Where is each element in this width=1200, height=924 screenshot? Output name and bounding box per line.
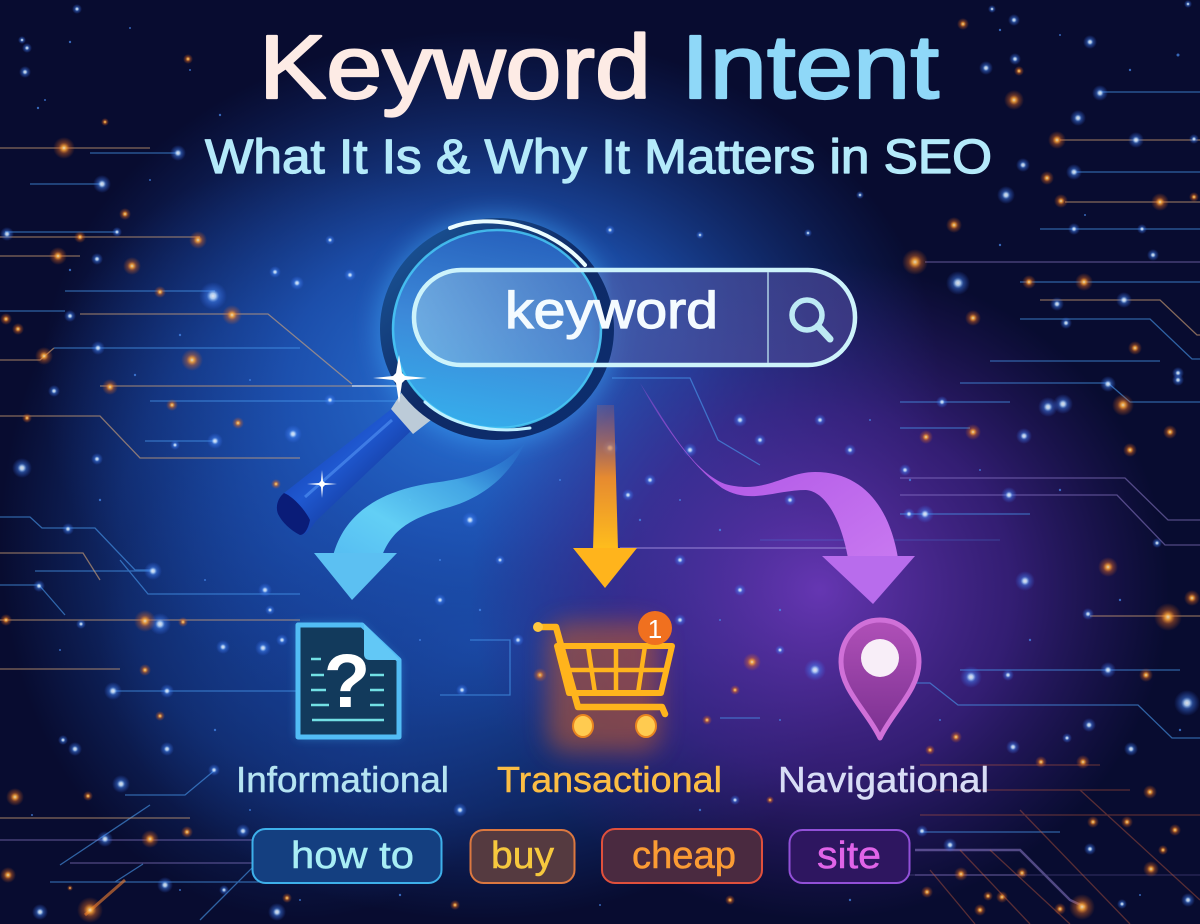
title: Keyword: [259, 18, 651, 118]
search field: [414, 270, 855, 365]
subtitle: What It Is & Why It Matters in SEO: [205, 131, 992, 184]
icon: lens: [391, 228, 603, 430]
tag: site: site: [817, 835, 881, 877]
tag: buy: buy: [491, 835, 554, 877]
cart badge: [638, 611, 672, 645]
search term: keyword: [505, 282, 718, 340]
label: navigational: Navigational: [778, 759, 989, 800]
icon: sparkle: [307, 355, 427, 498]
search bar: [386, 221, 855, 434]
title: Intent: [681, 18, 939, 118]
icon: handle: [277, 407, 412, 535]
divider: [767, 272, 769, 363]
tag: cheap: [602, 829, 762, 883]
magnifying glass: [277, 215, 617, 535]
tag: cheap: cheap: [632, 835, 736, 877]
cart wheels: [573, 715, 656, 737]
icon: handle cap: [277, 493, 310, 535]
tag: buy: [470, 830, 574, 883]
magnifier rim: [386, 221, 608, 434]
icon: handle highlight: [305, 420, 392, 497]
icon: search: [792, 300, 830, 339]
arrow: informational: [314, 443, 525, 600]
arrow: navigational: [640, 383, 915, 604]
search field border: [414, 270, 855, 365]
label: informational: Informational: [236, 759, 449, 800]
lens glow: [377, 215, 617, 443]
cart badge: 1: [648, 614, 662, 644]
title: [259, 18, 939, 118]
question mark: ?: [324, 639, 370, 724]
tag: how to: how to: [291, 835, 414, 877]
tag: site: [790, 830, 910, 883]
tag: how to: [252, 829, 442, 883]
label: transactional: Transactional: [497, 759, 722, 800]
icon: shopping cart: [533, 611, 672, 752]
icon: question document: [297, 624, 400, 738]
icon: location pin: [841, 620, 919, 738]
arrow: transactional: [573, 405, 637, 588]
icon: handle collar: [391, 392, 431, 434]
